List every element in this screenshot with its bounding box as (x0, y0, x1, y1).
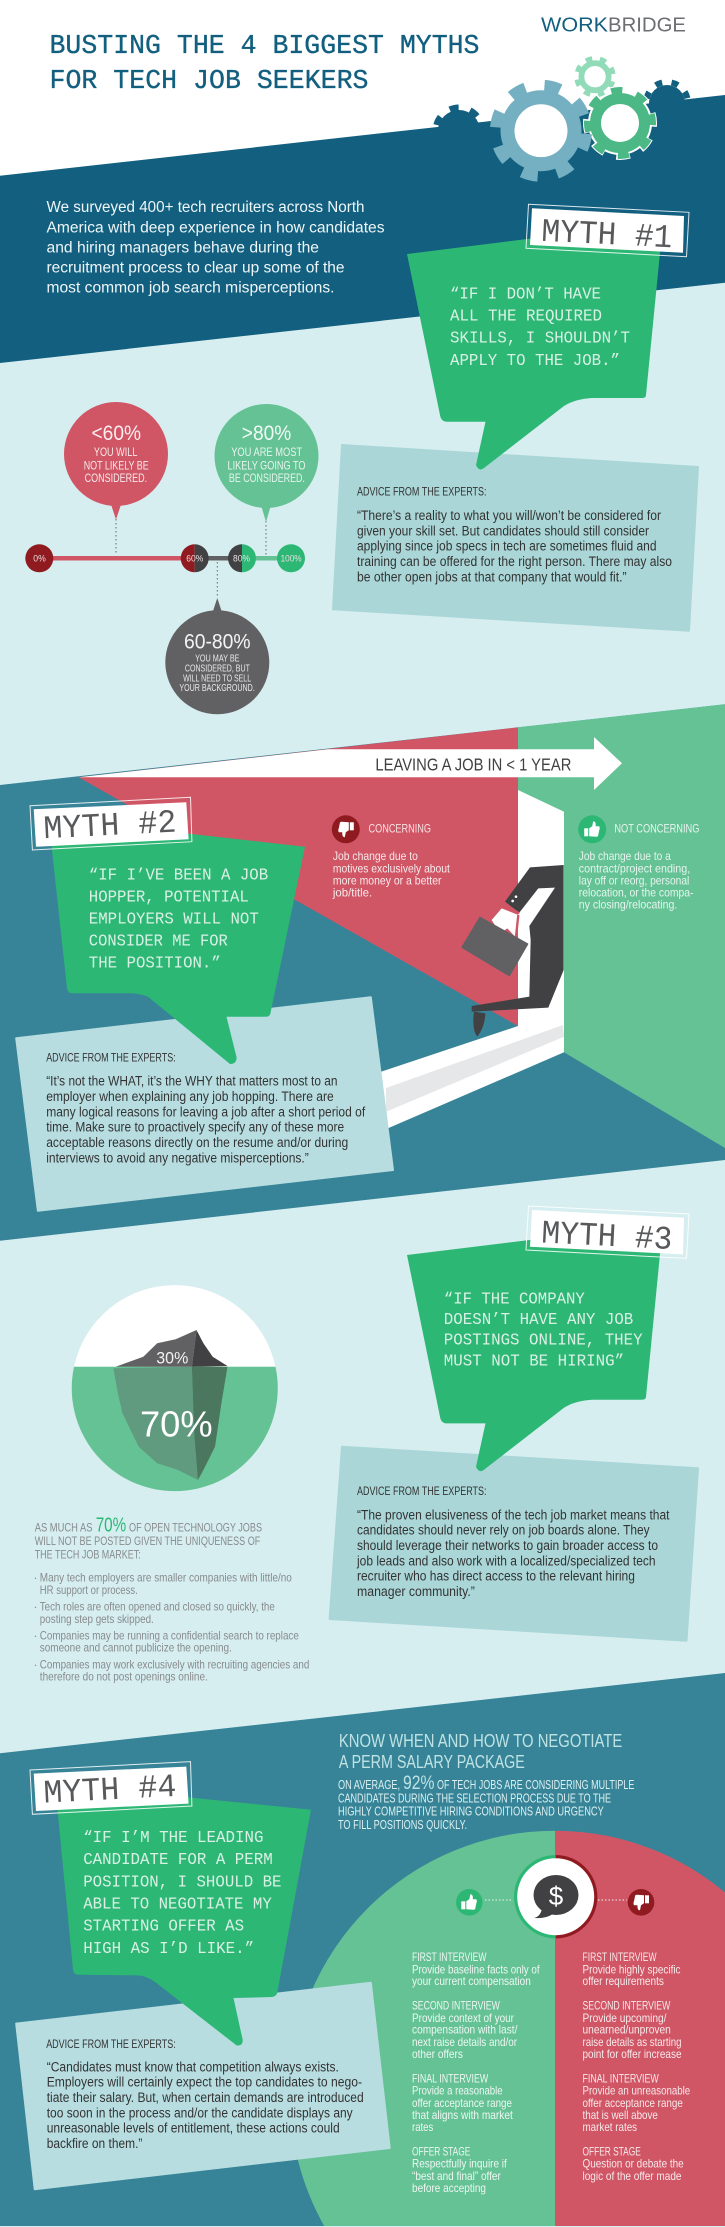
panel: myth 3 advice: manager community.” (357, 1584, 475, 1599)
text: 92 percent statistic: 92% (403, 1773, 434, 1794)
text: 92 percent statistic: HIGHLY COMPETITIVE HIRING CONDITIONS AND URGENCY (338, 1805, 604, 1819)
band: myth 2 section (0, 704, 725, 1241)
title: FOR TECH JOB SEEKERS (50, 67, 368, 97)
heading: negotiate a perm salary package (339, 1731, 622, 1772)
speech bubble: myth 1 quote: “IF I DON’T HAVE (450, 285, 601, 304)
speech bubble: myth 4 quote: CANDIDATE FOR A PERM (83, 1851, 273, 1870)
icon: thumbs down (628, 1889, 654, 1916)
intro text: America with deep experience in how candidates (46, 219, 385, 236)
dotted connectors (485, 1899, 627, 1901)
icon: gears (432, 55, 692, 179)
panel: myth 1 advice (333, 445, 698, 631)
text: 70 percent statistic (35, 1515, 262, 1561)
text: 92 percent statistic: TO FILL POSITIONS QUICKLY. (338, 1818, 467, 1832)
heading: negotiate a perm salary package: KNOW WHEN AND HOW TO NEGOTIATE (339, 1731, 622, 1751)
column: what to do: “best and final” offer (412, 2169, 501, 2183)
bubble: over 80 percent: YOU ARE MOST (231, 445, 303, 459)
chart: negotiation do and don't half circles (290, 1831, 725, 2226)
bubble: 60 to 80 percent: 60-80% (184, 630, 251, 653)
band: myth 4 section (0, 1673, 725, 2226)
column: what to do: your current compensation (412, 1974, 531, 1988)
column: what not to do: Provide highly specific (582, 1962, 680, 1976)
speech bubble: myth 1 quote (407, 222, 663, 469)
heading: negotiate a perm salary package: A PERM SALARY PACKAGE (339, 1752, 525, 1772)
column: what not to do: Provide an unreasonable (582, 2084, 690, 2098)
icon: thumbs up (456, 1889, 483, 1916)
panel: myth 3 advice: recruiter who has direct access to the relevant hiring (357, 1569, 635, 1584)
not concerning note: Job change due to a (579, 849, 671, 863)
list: why jobs are not posted: Many tech employers are smaller companies with little/no (40, 1571, 292, 1585)
concerning note (332, 815, 450, 900)
speech bubble: myth 1 quote: SKILLS, I SHOULDN’T (450, 330, 630, 349)
concerning note: Job change due to (333, 849, 418, 863)
column: what to do: FIRST INTERVIEW (412, 1950, 487, 1964)
bubble: over 80 percent: LIKELY GOING TO (228, 458, 306, 472)
arrow: leaving a job in under a year: LEAVING A JOB IN < 1 YEAR (375, 755, 571, 775)
arrow: leaving a job in under a year (79, 737, 622, 790)
panel: myth 2 advice: time. Make sure to proactively specify any of these more (46, 1120, 344, 1135)
logo: Workbridge: WORK (541, 14, 608, 37)
not concerning note: NOT CONCERNING (614, 821, 699, 835)
column: what not to do: point for offer increase (582, 2047, 682, 2061)
column: what to do: FINAL INTERVIEW (412, 2072, 489, 2086)
panel: myth 2 advice (16, 997, 393, 1211)
icon: thumbs down (332, 815, 360, 843)
speech bubble: myth 2 quote: CONSIDER ME FOR (89, 932, 228, 951)
speech bubble: myth 3 quote: POSTINGS ONLINE, THEY (444, 1332, 643, 1351)
speech bubble: myth 4 quote: ABLE TO NEGOTIATE MY (83, 1896, 272, 1914)
concerning note: job/title. (332, 886, 372, 900)
bubble: 60 to 80 percent (165, 598, 269, 714)
bubble: 60 to 80 percent: CONSIDERED, BUT (185, 664, 250, 675)
panel: myth 2 advice: interviews to avoid any negative misperceptions.” (46, 1150, 309, 1165)
panel: myth 4 advice: too soon in the process and/or the candidate displays any (47, 2105, 353, 2120)
icon: thumbs up (578, 815, 606, 843)
panel: myth 3 advice: ADVICE FROM THE EXPERTS: (357, 1484, 486, 1498)
bubble: under 60 percent: YOU WILL (94, 445, 138, 459)
speech bubble: myth 4 quote (55, 1784, 311, 2046)
column: what not to do: SECOND INTERVIEW (582, 1999, 671, 2013)
intro text (46, 199, 385, 297)
concerning note: motives exclusively about (333, 861, 450, 875)
icon: dollar speech bubble: $ (549, 1881, 564, 1911)
chart: consideration timeline: 80% (233, 554, 250, 564)
speech bubble: myth 3 quote (407, 1224, 663, 1471)
text: 70 percent statistic: THE TECH JOB MARKET: (35, 1547, 141, 1561)
bubble: over 80 percent: >80% (242, 422, 291, 445)
speech bubble: myth 2 quote (48, 818, 305, 1064)
title (50, 32, 480, 97)
chart: consideration timeline: 100% (281, 554, 302, 564)
column: what not to do (582, 1950, 690, 2183)
column: what to do: other offers (412, 2047, 463, 2061)
intro text: most common job search misperceptions. (46, 280, 334, 297)
speech bubble: myth 4 quote: “IF I’M THE LEADING (83, 1829, 264, 1848)
panel: myth 4 advice: tiate their salary. But, when certain demands are introduced (47, 2090, 364, 2105)
list: why jobs are not posted: Companies may be running a confidential search to replace (40, 1628, 299, 1642)
text: 92 percent statistic (338, 1773, 634, 1832)
panel: myth 2 advice: many logical reasons for leaving a job after a short period of (46, 1104, 365, 1119)
column: what to do: next raise details and/or (412, 2035, 517, 2049)
not concerning note: relocation, or the compa- (579, 886, 694, 900)
panel: myth 4 advice (16, 1983, 390, 2189)
chart: consideration timeline: 60% (186, 554, 203, 564)
bubble: over 80 percent (214, 404, 318, 522)
list: why jobs are not posted: HR support or process. (40, 1583, 138, 1597)
column: what to do: before accepting (412, 2181, 486, 2195)
speech bubble: myth 2 quote: EMPLOYERS WILL NOT (89, 910, 259, 929)
panel: myth 3 advice: should leverage their networks to gain broader access to (357, 1538, 658, 1553)
panel: myth 1 advice: “There’s a reality to what you will/won’t be considered for (357, 508, 661, 523)
panel: myth 4 advice: “Candidates must know that competition always exists. (47, 2059, 339, 2074)
column: what to do: that aligns with market (412, 2108, 513, 2122)
speech bubble: myth 4 quote: HIGH AS I’D LIKE.” (83, 1940, 254, 1959)
panel: myth 2 advice: ADVICE FROM THE EXPERTS: (46, 1051, 176, 1065)
column: what not to do: offer requirements (582, 1974, 664, 1988)
column: what to do: Provide baseline facts only of (412, 1962, 540, 1976)
text: 70 percent statistic: AS MUCH AS (35, 1521, 92, 1535)
icon: dollar speech bubble (514, 1855, 597, 1938)
column: what to do: OFFER STAGE (412, 2144, 470, 2158)
panel: myth 4 advice: Employers will certainly expect the top candidates to nego- (47, 2075, 362, 2090)
text: 70 percent statistic: 70% (96, 1515, 126, 1537)
column: what not to do: unearned/unproven (582, 2023, 671, 2037)
bubble: under 60 percent (64, 402, 168, 520)
concerning note: more money or a better (333, 873, 442, 887)
list: why jobs are not posted: · (34, 1600, 38, 1614)
speech bubble: myth 1 quote: ALL THE REQUIRED (450, 308, 602, 327)
not concerning note (578, 815, 699, 912)
myth 2 label: MYTH #2 (43, 805, 177, 848)
logo: Workbridge: BRIDGE (608, 14, 686, 37)
list: why jobs are not posted: posting step gets skipped. (40, 1612, 154, 1626)
panel: myth 2 advice: employer when explaining any job hopping. There are (46, 1089, 334, 1104)
not concerning note: ny closing/relocating. (579, 898, 677, 912)
list: why jobs are not posted: therefore do not post openings online. (40, 1670, 208, 1684)
panel: myth 4 advice: unreasonable levels of entitlement, these actions could (47, 2121, 340, 2136)
panel: myth 1 advice: ADVICE FROM THE EXPERTS: (357, 485, 486, 499)
text: 92 percent statistic: CANDIDATES DURING THE SELECTION PROCESS DUE TO THE (338, 1791, 611, 1805)
bubble: under 60 percent: <60% (92, 422, 141, 445)
text: 92 percent statistic: ON AVERAGE, (338, 1778, 400, 1792)
speech bubble: myth 3 quote: “IF THE COMPANY (444, 1290, 585, 1309)
concerning note: CONCERNING (368, 821, 431, 835)
panel: myth 3 advice: job leads and also work with a localized/specialized tech (356, 1553, 656, 1568)
list: why jobs are not posted: · (34, 1628, 38, 1642)
speech bubble: myth 2 quote: “IF I’VE BEEN A JOB (89, 866, 268, 885)
intro band (0, 95, 725, 363)
column: what to do: rates (412, 2120, 433, 2134)
panel: myth 3 advice (330, 1447, 698, 1641)
title: BUSTING THE 4 BIGGEST MYTHS (50, 32, 480, 62)
bubble: 60 to 80 percent: YOU MAY BE (195, 654, 240, 665)
column: what not to do: logic of the offer made (582, 2169, 682, 2183)
chart: consideration timeline: 0% (33, 554, 46, 564)
column: what to do: Respectfully inquire if (412, 2157, 507, 2171)
bubble: under 60 percent: CONSIDERED. (85, 471, 147, 485)
not concerning note: contract/project ending, (579, 861, 690, 875)
column: what not to do: Question or debate the (582, 2157, 684, 2171)
intro text: We surveyed 400+ tech recruiters across North (46, 199, 364, 216)
bubble: under 60 percent: NOT LIKELY BE (84, 458, 149, 472)
column: what to do: Provide a reasonable (412, 2084, 503, 2098)
speech bubble: myth 3 quote: DOESN’T HAVE ANY JOB (444, 1311, 633, 1330)
speech bubble: myth 2 quote: THE POSITION.” (89, 955, 221, 974)
column: what not to do: that is well above (582, 2108, 658, 2122)
doorway and floor (381, 760, 564, 1128)
list: why jobs are not posted: Companies may work exclusively with recruiting agencies and (40, 1657, 309, 1671)
panel: myth 1 advice: training can be offered for the right person. There may also (357, 554, 672, 569)
list: why jobs are not posted: Tech roles are often opened and closed so quickly, the (40, 1600, 275, 1614)
chart: iceberg 30/70: 30% (156, 1348, 188, 1367)
column: what not to do: FINAL INTERVIEW (582, 2072, 659, 2086)
column: what to do: Provide context of your (412, 2011, 514, 2025)
text: 70 percent statistic: OF OPEN TECHNOLOGY JOBS (129, 1521, 262, 1535)
list: why jobs are not posted: · (34, 1657, 38, 1671)
speech bubble: myth 2 quote: HOPPER, POTENTIAL (89, 888, 249, 907)
chart: iceberg 30/70: 70% (140, 1404, 213, 1445)
myth 4 label: MYTH #4 (43, 1769, 177, 1813)
panel: myth 1 advice: be other open jobs at that company that would fit.” (357, 569, 626, 584)
column: what not to do: market rates (582, 2120, 637, 2134)
panel: myth 3 advice: “The proven elusiveness of the tech job market means that (357, 1507, 670, 1522)
text: 92 percent statistic: OF TECH JOBS ARE CONSIDERING MULTIPLE (437, 1778, 634, 1792)
speech bubble: myth 4 quote: STARTING OFFER AS (83, 1917, 244, 1936)
chart: iceberg 30/70 (72, 1285, 278, 1491)
list: why jobs are not posted: someone and cannot publicize the opening. (40, 1641, 232, 1655)
panel: myth 3 advice: candidates should never rely on job boards alone. They (357, 1523, 650, 1538)
bubble: 60 to 80 percent: WILL NEED TO SELL (183, 673, 251, 684)
myth 1 label: MYTH #1 (540, 214, 673, 257)
panel: myth 2 advice: acceptable reasons directly on the resume and/or during (46, 1135, 348, 1150)
panel: myth 4 advice: backfire on them.” (47, 2136, 142, 2151)
chart: consideration timeline (25, 519, 305, 598)
column: what to do (412, 1950, 540, 2195)
column: what to do: compensation with last/ (412, 2023, 518, 2037)
wall: not concerning (518, 704, 725, 1148)
bubble: over 80 percent: BE CONSIDERED. (229, 471, 305, 485)
column: what not to do: raise details as starting (582, 2035, 682, 2049)
myth 3 label: MYTH #3 (540, 1215, 673, 1259)
column: what to do: SECOND INTERVIEW (412, 1999, 500, 2013)
column: what not to do: Provide upcoming/ (582, 2011, 667, 2025)
panel: myth 1 advice: given your skill set. But candidates should still consider (357, 523, 649, 538)
panel: myth 4 advice: ADVICE FROM THE EXPERTS: (46, 2037, 176, 2051)
intro text: recruitment process to clear up some of the (46, 260, 344, 277)
logo: Workbridge (541, 14, 686, 37)
panel: myth 2 advice: “It’s not the WHAT, it’s the WHY that matters most to an (46, 1074, 337, 1089)
list: why jobs are not posted: · (34, 1571, 38, 1585)
speech bubble: myth 4 quote: POSITION, I SHOULD BE (83, 1874, 282, 1892)
not concerning note: lay off or reorg, personal (579, 873, 689, 887)
panel: myth 1 advice: applying since job specs in tech are sometimes fluid and (357, 539, 656, 554)
column: what not to do: offer acceptance range (582, 2096, 683, 2110)
text: 70 percent statistic: WILL NOT BE POSTED GIVEN THE UNIQUENESS OF (35, 1534, 260, 1548)
bubble: 60 to 80 percent: YOUR BACKGROUND. (179, 683, 255, 694)
column: what not to do: FIRST INTERVIEW (582, 1950, 657, 1964)
list: why jobs are not posted (34, 1571, 309, 1684)
intro text: and hiring managers behave during the (46, 239, 319, 256)
wall: concerning (79, 727, 518, 1026)
figure: person walking out with briefcase (462, 865, 564, 1037)
column: what to do: offer acceptance range (412, 2096, 512, 2110)
speech bubble: myth 3 quote: MUST NOT BE HIRING” (444, 1353, 624, 1372)
column: what not to do: OFFER STAGE (582, 2144, 641, 2158)
speech bubble: myth 1 quote: APPLY TO THE JOB.” (450, 352, 620, 371)
